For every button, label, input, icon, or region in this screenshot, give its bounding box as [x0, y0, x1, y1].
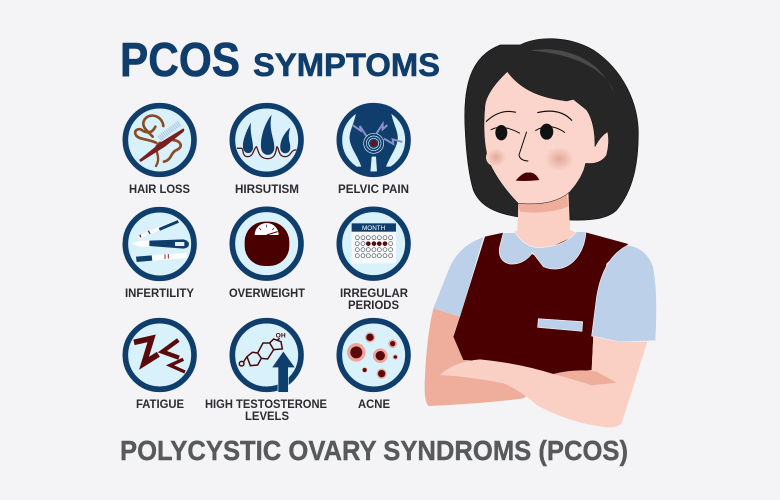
label: irregular periods [340, 286, 408, 312]
icon: hair loss [125, 106, 194, 174]
label: fatigue: FATIGUE [136, 397, 184, 411]
label: high testosterone levels: LEVELS [245, 409, 289, 423]
label: pelvic pain: PELVIC PAIN [338, 182, 409, 196]
label: overweight: OVERWEIGHT [229, 286, 306, 300]
label: high testosterone levels: HIGH TESTOSTERONE [205, 397, 327, 411]
icon: fatigue [125, 321, 194, 389]
label: infertility: INFERTILITY [125, 286, 194, 300]
woman illustration [425, 39, 657, 427]
icon: pelvic pain [334, 103, 414, 177]
label: acne: ACNE [358, 397, 390, 411]
title: PCOS [120, 34, 240, 87]
head and hair [465, 39, 638, 230]
label: irregular periods: PERIODS [348, 298, 399, 312]
label: irregular periods: IRREGULAR [340, 286, 408, 300]
icon: infertility [125, 210, 194, 278]
torso and arms [425, 220, 657, 427]
bottom heading: POLYCYSTIC OVARY SYNDROMS (PCOS) [120, 435, 628, 466]
icon: irregular periods calendar: MONTH [362, 225, 386, 232]
icon: high testosterone [232, 321, 301, 392]
title [120, 34, 440, 87]
icon: high testosterone: OH [276, 333, 286, 340]
icon: irregular periods calendar [339, 209, 408, 278]
icon: hirsutism [232, 106, 301, 174]
icon: acne [339, 321, 408, 389]
icon: overweight scale [232, 209, 301, 278]
label: hirsutism: HIRSUTISM [235, 182, 299, 196]
label: high testosterone levels [205, 397, 327, 423]
title: SYMPTOMS [253, 47, 440, 83]
label: hair loss: HAIR LOSS [129, 182, 190, 196]
